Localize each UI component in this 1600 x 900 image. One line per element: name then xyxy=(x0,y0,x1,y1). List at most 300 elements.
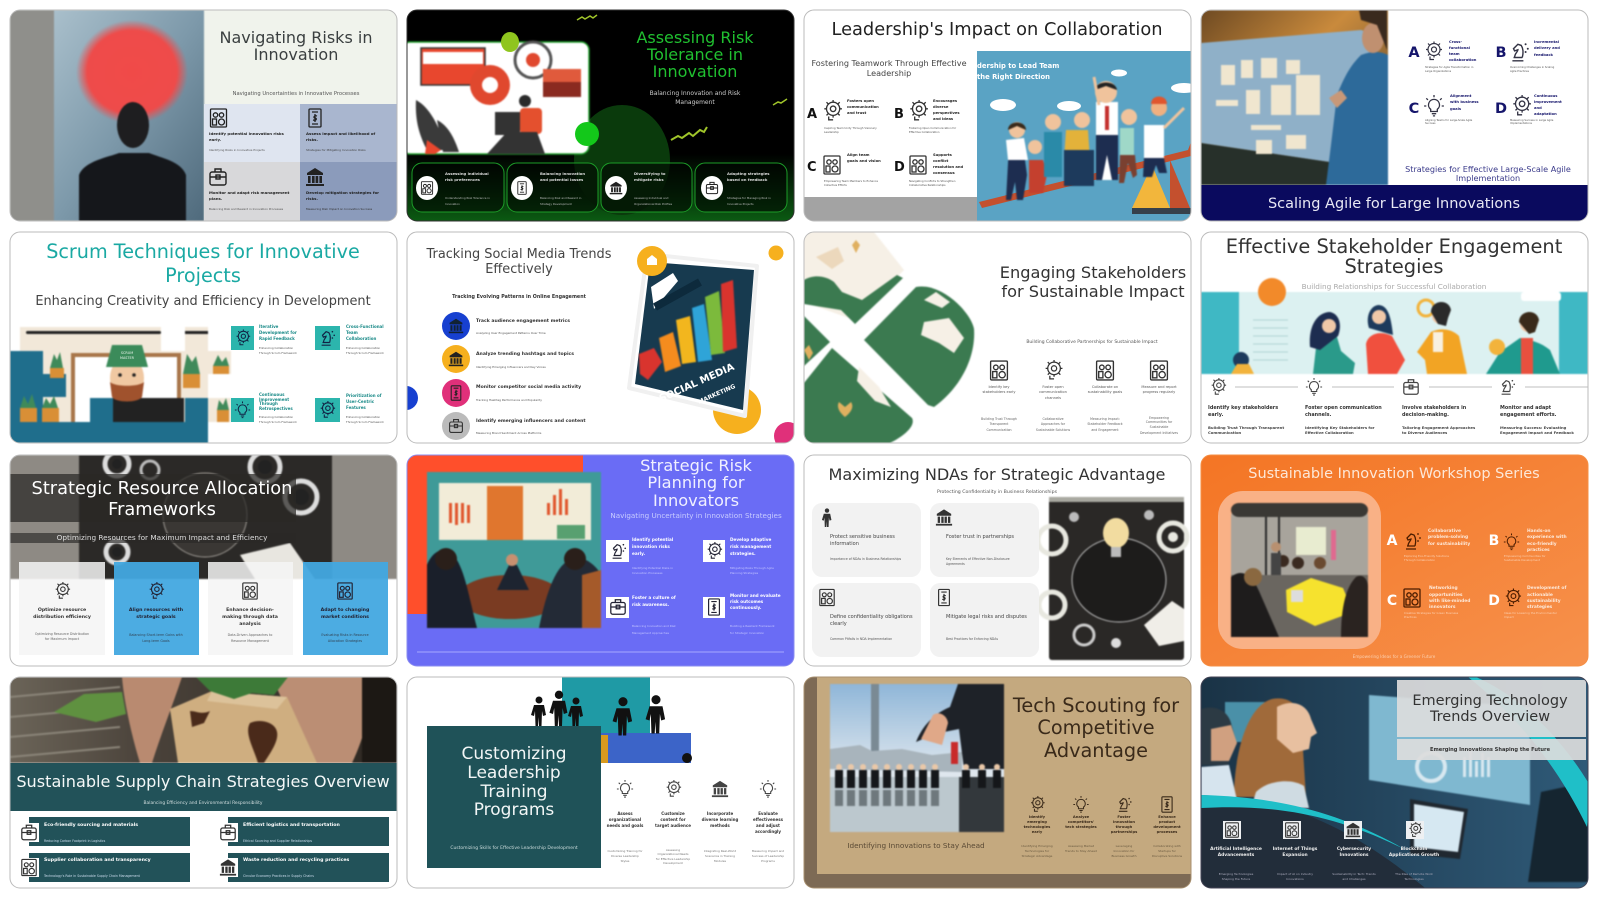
icon xyxy=(1406,533,1421,549)
label: Protect sensitive business xyxy=(830,534,895,540)
label: Rapid Feedback xyxy=(259,336,295,341)
note: Stakeholder Feedback xyxy=(1087,422,1123,426)
card: Scrum Techniques xyxy=(10,232,397,443)
note: Technologies for xyxy=(1024,849,1050,853)
label: collaboration xyxy=(1449,58,1477,62)
note: Organizational Risk Profiles xyxy=(634,202,673,206)
label: Assess xyxy=(617,811,633,816)
note: Practices xyxy=(1404,615,1417,619)
icon xyxy=(1212,378,1226,394)
icon xyxy=(1344,821,1362,839)
note: Assessing Individual and xyxy=(634,196,669,200)
label: Networking xyxy=(1429,585,1458,591)
note: Empowering xyxy=(1149,416,1169,420)
title: Tolerance in xyxy=(646,45,743,64)
note: Development xyxy=(663,861,684,865)
note: Styles xyxy=(621,859,630,863)
label: Adapting strategies xyxy=(727,171,770,176)
label: opportunities xyxy=(1429,592,1463,598)
label: Mitigate legal risks and disputes xyxy=(946,614,1027,620)
label: Hands-on xyxy=(1527,528,1550,534)
note: Development Initiatives xyxy=(1140,431,1178,435)
illustration: person at laptop xyxy=(402,42,589,154)
label: emerging xyxy=(1027,820,1047,824)
label: team xyxy=(1449,52,1460,56)
label: channels. xyxy=(1305,412,1332,418)
label: for sustainability xyxy=(1428,541,1470,547)
label: functional xyxy=(1449,46,1470,50)
label: tech strategies xyxy=(1065,825,1098,829)
label: clearly xyxy=(830,621,847,627)
label: Monitor and adapt risk management xyxy=(209,190,289,195)
column 3 xyxy=(702,781,738,863)
letter: A xyxy=(1387,533,1398,549)
item D xyxy=(1488,585,1566,619)
label: diverse learning xyxy=(702,817,738,822)
column 4 xyxy=(303,562,388,655)
icon xyxy=(19,823,39,842)
note: Planning Strategies xyxy=(730,571,759,575)
note: Sustainable Development xyxy=(1504,558,1541,562)
note: Modules xyxy=(714,859,726,863)
label: Foster trust in partnerships xyxy=(946,534,1014,540)
label: and ideas xyxy=(933,117,954,121)
label: Expansion xyxy=(1282,852,1308,858)
note: Identifying Emerging xyxy=(1021,844,1053,848)
note: Agile Practices xyxy=(1510,69,1530,73)
bar: eco-friendly sourcing xyxy=(19,817,190,846)
note: Sustainability in Tech: Trends xyxy=(1332,872,1376,876)
note: Through Collaboration xyxy=(1403,558,1435,562)
note: Enhancing Collaboration xyxy=(346,346,380,350)
note: and Challenges xyxy=(1342,877,1366,881)
illustration: world map xyxy=(804,232,974,443)
label: early xyxy=(1032,830,1043,834)
label: making through data xyxy=(222,614,278,620)
letter: B xyxy=(1489,533,1499,549)
label: and xyxy=(1534,106,1542,110)
item A xyxy=(1387,528,1470,562)
title: Effectively xyxy=(485,262,553,277)
label: Cross-Functional xyxy=(346,324,384,329)
label: progress regularly xyxy=(1143,390,1176,394)
label: engagement efforts. xyxy=(1500,412,1557,418)
banner title xyxy=(1201,185,1588,221)
label: risk management xyxy=(730,544,771,549)
note: Identifying Key Stakeholders for xyxy=(1305,425,1375,430)
label: innovators xyxy=(1429,604,1456,610)
title overlay: Emerging Technology xyxy=(1412,693,1568,709)
title panel: Programs xyxy=(474,800,554,820)
note: Sustainable xyxy=(1150,425,1168,429)
label: Foster xyxy=(1117,815,1131,819)
title panel xyxy=(427,726,601,868)
title: Effective Stakeholder Engagement xyxy=(1226,235,1563,258)
note: Assessing Market xyxy=(1068,844,1095,848)
label: analysis xyxy=(239,621,261,627)
note: Leveraging xyxy=(1116,844,1132,848)
label: Enhance xyxy=(1158,815,1176,819)
icon xyxy=(309,109,321,127)
label: Development of xyxy=(1527,585,1566,591)
bar: efficient logistics xyxy=(218,817,389,846)
icon xyxy=(1073,796,1089,812)
painting: boardroom meeting xyxy=(427,472,601,628)
illustration: scrum master xyxy=(10,327,231,443)
note: Innovative Projects xyxy=(727,202,754,206)
note: Enhancing Collaboration xyxy=(259,415,293,419)
icon xyxy=(760,780,776,797)
note: Aligning Teams for Large-Scale Agile xyxy=(1425,118,1473,122)
title: Tracking Social Media Trends xyxy=(426,247,612,262)
note: Measuring Success in Large Agile xyxy=(1510,118,1554,122)
title band xyxy=(10,763,397,811)
label: product xyxy=(1159,820,1175,824)
item: influencers xyxy=(442,412,586,440)
panel: protect xyxy=(812,503,921,577)
panel xyxy=(114,562,199,655)
column 1 xyxy=(981,361,1017,432)
card: Scaling Agile xyxy=(1201,10,1588,221)
label: risk awareness. xyxy=(632,602,669,607)
card: Navigating Risks in Innovation xyxy=(10,10,397,221)
item: identify xyxy=(606,537,674,575)
label: Cybersecurity xyxy=(1337,846,1371,852)
item 3 xyxy=(1402,380,1476,435)
title: Strategic Risk xyxy=(640,456,753,475)
note: Strategic Advantage xyxy=(1022,854,1053,858)
label: distribution efficiency xyxy=(33,614,91,620)
icon xyxy=(605,176,627,200)
note: Large Organizations xyxy=(1425,69,1452,73)
note: to Diverse Audiences xyxy=(1402,430,1448,435)
item: prioritization xyxy=(315,393,384,424)
item 4 xyxy=(1500,380,1574,435)
note: Balancing Short-term Gains with xyxy=(129,633,183,637)
label: communication xyxy=(1039,390,1067,394)
item B xyxy=(1489,528,1567,562)
label: early. xyxy=(1208,412,1223,418)
subtitle: Management xyxy=(675,99,715,106)
note: Innovation Processes xyxy=(632,571,663,575)
note: The Rise of Remote Work xyxy=(1394,872,1433,876)
label: Incremental xyxy=(1534,40,1559,44)
note: Empowering Team Members to Enhance xyxy=(824,179,878,183)
item C xyxy=(1387,585,1470,619)
icon xyxy=(1424,95,1444,116)
label: Identify key stakeholders xyxy=(1208,405,1278,411)
label: Artificial Intelligence xyxy=(1210,846,1262,852)
label: Assessing individual xyxy=(445,171,489,176)
icon xyxy=(416,176,438,200)
note: Approaches for xyxy=(1041,422,1066,426)
note: Customizing Training for xyxy=(607,849,643,853)
icon xyxy=(442,345,470,373)
note: Innovations xyxy=(1286,877,1304,881)
card: Maximizing NDAs xyxy=(804,455,1191,666)
item A xyxy=(1408,40,1477,73)
label: consensus xyxy=(933,171,955,175)
icon xyxy=(1223,821,1241,839)
title panel: Leadership xyxy=(467,763,561,783)
note: Optimizing Resource Distribution xyxy=(35,632,89,636)
note: Balancing Innovation and Risk xyxy=(632,624,676,628)
label: Prioritization of xyxy=(346,393,382,398)
note: Building Trust Through xyxy=(981,417,1017,421)
panel xyxy=(19,562,105,655)
note: Collaborating with xyxy=(1153,844,1181,848)
label: feedback xyxy=(1534,53,1554,57)
label: Supports xyxy=(933,153,953,157)
note: Exploring Eco-Friendly Solutions xyxy=(1404,554,1449,558)
title: Scrum Techniques for Innovative xyxy=(46,240,360,263)
label: Balancing innovation xyxy=(540,171,585,176)
label: needs and goals xyxy=(607,823,644,828)
label: Adapt to changing xyxy=(321,607,369,613)
note: Creative Strategies for Green Business xyxy=(1404,611,1459,615)
note: Reducing Carbon Footprint in Logistics xyxy=(44,839,106,843)
subtitle: Strategies for Effective Large-Scale Agile xyxy=(1405,164,1571,174)
note: Through Scrum Framework xyxy=(258,420,297,424)
icon xyxy=(1031,796,1045,811)
icon xyxy=(939,589,949,606)
note: Diverse Leadership xyxy=(611,854,639,858)
note: Identifying Potential Risks in xyxy=(632,566,673,570)
illustration: figures on blocks xyxy=(531,677,692,763)
label: practices xyxy=(1527,547,1550,553)
banner title: Scaling Agile for Large Innovations xyxy=(1268,196,1520,212)
icon xyxy=(210,109,226,127)
note: Measuring Impact and xyxy=(752,849,784,853)
title: Maximizing NDAs for Strategic Advantage xyxy=(829,465,1166,484)
teal swoosh and dark panel xyxy=(1201,677,1591,900)
label: Identify xyxy=(1029,815,1046,819)
column 1 xyxy=(607,780,644,863)
title: Tech Scouting for xyxy=(1012,694,1179,717)
item: engagement xyxy=(442,312,570,340)
note: Effective Collaboration xyxy=(909,130,940,134)
letter: C xyxy=(807,160,817,175)
icon xyxy=(218,823,238,842)
note: Technology's Role in Sustainable Supply Chain Management xyxy=(43,874,141,878)
icon xyxy=(1119,798,1132,811)
label: Improvement xyxy=(259,397,289,402)
note: Effective Collaboration xyxy=(1305,430,1354,435)
label: communication xyxy=(847,105,879,109)
note: Strategies for Managing Risk in xyxy=(727,196,771,200)
photo: gears and targets xyxy=(10,452,397,579)
photo: lightbulb and gears xyxy=(1038,497,1187,660)
item B xyxy=(1495,40,1560,73)
title overlay xyxy=(1397,680,1586,760)
column 2 xyxy=(1273,821,1318,881)
label: sustainability goals xyxy=(1088,390,1122,394)
note: Disruptive Solutions xyxy=(1152,854,1182,858)
label: Involve stakeholders in xyxy=(1402,405,1467,411)
note: Long-term Goals xyxy=(142,639,170,643)
title: Frameworks xyxy=(108,499,216,520)
note: Importance of NDAs in Business Relationships xyxy=(830,557,901,561)
subtitle: Navigating Uncertainties in Innovative Processes xyxy=(233,91,360,97)
note: Inspiring Team Unity Through Visionary xyxy=(824,126,877,130)
icon xyxy=(1283,821,1301,839)
subtitle: Identifying Innovations to Stay Ahead xyxy=(847,841,985,850)
note: Communities for xyxy=(1146,420,1173,424)
label: innovation xyxy=(1113,820,1135,824)
label: Foster open xyxy=(1042,385,1064,389)
icon xyxy=(442,379,470,407)
label: Continuous xyxy=(259,392,285,397)
item: assess impact xyxy=(306,109,376,152)
note: Common Pitfalls in NDA Implementation xyxy=(830,637,892,641)
label: Waste reduction and recycling practices xyxy=(243,857,350,863)
title band: Sustainable Supply Chain Strategies Overview xyxy=(16,772,390,791)
icon xyxy=(1504,534,1519,550)
note: Measuring Success: Evaluating xyxy=(1500,425,1567,430)
label: plans. xyxy=(209,196,223,201)
label: Efficient logistics and transportation xyxy=(243,822,340,828)
note: for Maximum Impact xyxy=(45,637,80,641)
note: Evaluating Risks in Resource xyxy=(321,633,369,637)
note: Data-Driven Approaches to xyxy=(228,633,272,637)
icon xyxy=(231,398,254,422)
item: mitigation xyxy=(306,168,379,211)
note: Impact xyxy=(1504,615,1515,619)
note: Shaping the Future xyxy=(1222,877,1250,881)
label: stakeholders early xyxy=(982,390,1016,394)
note: Empowering Communities for xyxy=(1504,554,1546,558)
label: early. xyxy=(209,137,222,142)
note: Allocation Strategies xyxy=(328,639,362,643)
label: Assess impact and likelihood of xyxy=(306,131,376,136)
subtitle: Enhancing Creativity and Efficiency in Development xyxy=(35,294,371,309)
letter: C xyxy=(1387,593,1397,609)
icon xyxy=(1513,95,1531,115)
note: Impact of AI on Industry xyxy=(1277,872,1313,876)
label: Monitor and adapt xyxy=(1500,405,1552,411)
item 2 xyxy=(1305,378,1382,435)
label: through xyxy=(1116,825,1133,829)
quadrant backgrounds xyxy=(204,104,397,221)
label: Collaborate on xyxy=(1092,385,1118,389)
label: Incorporate xyxy=(707,811,733,816)
icon xyxy=(703,597,725,618)
note: Strategies for Mitigating Innovation Risks xyxy=(306,148,366,152)
label: Retrospectives xyxy=(259,406,293,411)
column 3 xyxy=(1332,821,1376,881)
label: development xyxy=(1153,825,1181,829)
title: Competitive xyxy=(1037,716,1155,739)
icon xyxy=(306,168,324,186)
cap text: MASTER xyxy=(120,356,135,360)
label: competitors' xyxy=(1068,820,1094,824)
note: Building a Resilient Framework xyxy=(730,624,775,628)
note: Collective Efforts xyxy=(824,183,847,187)
note: Tracking Hashtag Performance and Popularity xyxy=(475,398,542,402)
label: Applications Growth xyxy=(1389,852,1439,858)
photo: analysts at monitors xyxy=(1201,695,1588,882)
card: Assessing Risk Tolerance xyxy=(402,10,794,221)
note: Trends to Stay Ahead xyxy=(1064,849,1097,853)
icon xyxy=(1506,588,1521,606)
label: Features xyxy=(346,405,366,410)
letter: B xyxy=(1495,45,1507,61)
label: sustainability xyxy=(1527,598,1561,604)
label: effectiveness xyxy=(753,817,784,822)
subtitle: Building Relationships for Successful Collaboration xyxy=(1302,282,1486,291)
label: improvement xyxy=(1534,100,1562,104)
label: and adjust xyxy=(756,823,780,828)
label: resolution and xyxy=(933,165,964,169)
note: Emerging Technologies xyxy=(1219,872,1254,876)
title: Strategic Resource Allocation xyxy=(32,478,292,499)
title band: Balancing Efficiency and Environmental Responsibility xyxy=(144,800,263,806)
label: delivery and xyxy=(1534,46,1560,50)
note: Tailoring Engagement Approaches xyxy=(1402,425,1476,430)
icon xyxy=(606,597,629,618)
note: Fostering Open Communication for xyxy=(909,126,957,130)
icon xyxy=(824,156,840,174)
label: actionable xyxy=(1527,592,1553,598)
icon xyxy=(511,176,533,200)
letter: A xyxy=(807,107,817,122)
column 1 xyxy=(19,562,105,655)
icon xyxy=(1097,361,1113,380)
text in image: dership to Lead Team xyxy=(977,62,1059,70)
note: Programs xyxy=(761,859,775,863)
label: Analyze trending hashtags and topics xyxy=(476,351,574,357)
bar: waste reduction xyxy=(218,853,389,882)
label: processes xyxy=(1157,830,1178,834)
label: conflict xyxy=(933,159,949,163)
title: Engaging Stakeholders xyxy=(1000,263,1186,282)
item: monitor xyxy=(209,169,289,211)
column 4 xyxy=(1152,797,1182,858)
label: Develop mitigation strategies for xyxy=(306,190,379,195)
label: strategies. xyxy=(730,551,756,556)
label: decision-making. xyxy=(1402,412,1449,418)
icon xyxy=(991,361,1007,380)
label: continuously. xyxy=(730,605,762,610)
title: Strategies xyxy=(1344,255,1444,278)
note: Building Trust Through Transparent xyxy=(1208,425,1284,430)
note: Identifying Emerging Influencers and Key Voices xyxy=(476,365,546,369)
label: Supplier collaboration and transparency xyxy=(44,857,151,863)
photo: hands holding a cardboard globe xyxy=(10,677,397,763)
note: Scenarios in Training xyxy=(705,854,735,858)
label: Fosters open xyxy=(847,99,874,103)
title: Sustainable Innovation Workshop Series xyxy=(1248,466,1540,482)
label: Iterative xyxy=(259,324,279,329)
item D xyxy=(1495,94,1562,125)
label: Continuous xyxy=(1534,94,1558,98)
note: Implementations xyxy=(1510,121,1533,125)
label: goals xyxy=(1450,107,1462,111)
label: Identify potential xyxy=(632,537,674,542)
note: Resource Management xyxy=(231,639,270,643)
icon xyxy=(667,780,681,796)
panel xyxy=(208,562,293,655)
label: with business xyxy=(1450,100,1479,104)
label: technologies xyxy=(1024,825,1051,829)
icon xyxy=(617,780,633,797)
note: Ethical Sourcing and Supplier Relationships xyxy=(243,839,312,843)
footer: Empowering Ideas for a Greener Future xyxy=(1353,654,1436,659)
label: risks. xyxy=(306,196,318,201)
note: and Engagement xyxy=(1091,428,1119,432)
note: Measuring Risk Impact on Innovation Success xyxy=(306,207,373,211)
item D xyxy=(894,153,964,187)
